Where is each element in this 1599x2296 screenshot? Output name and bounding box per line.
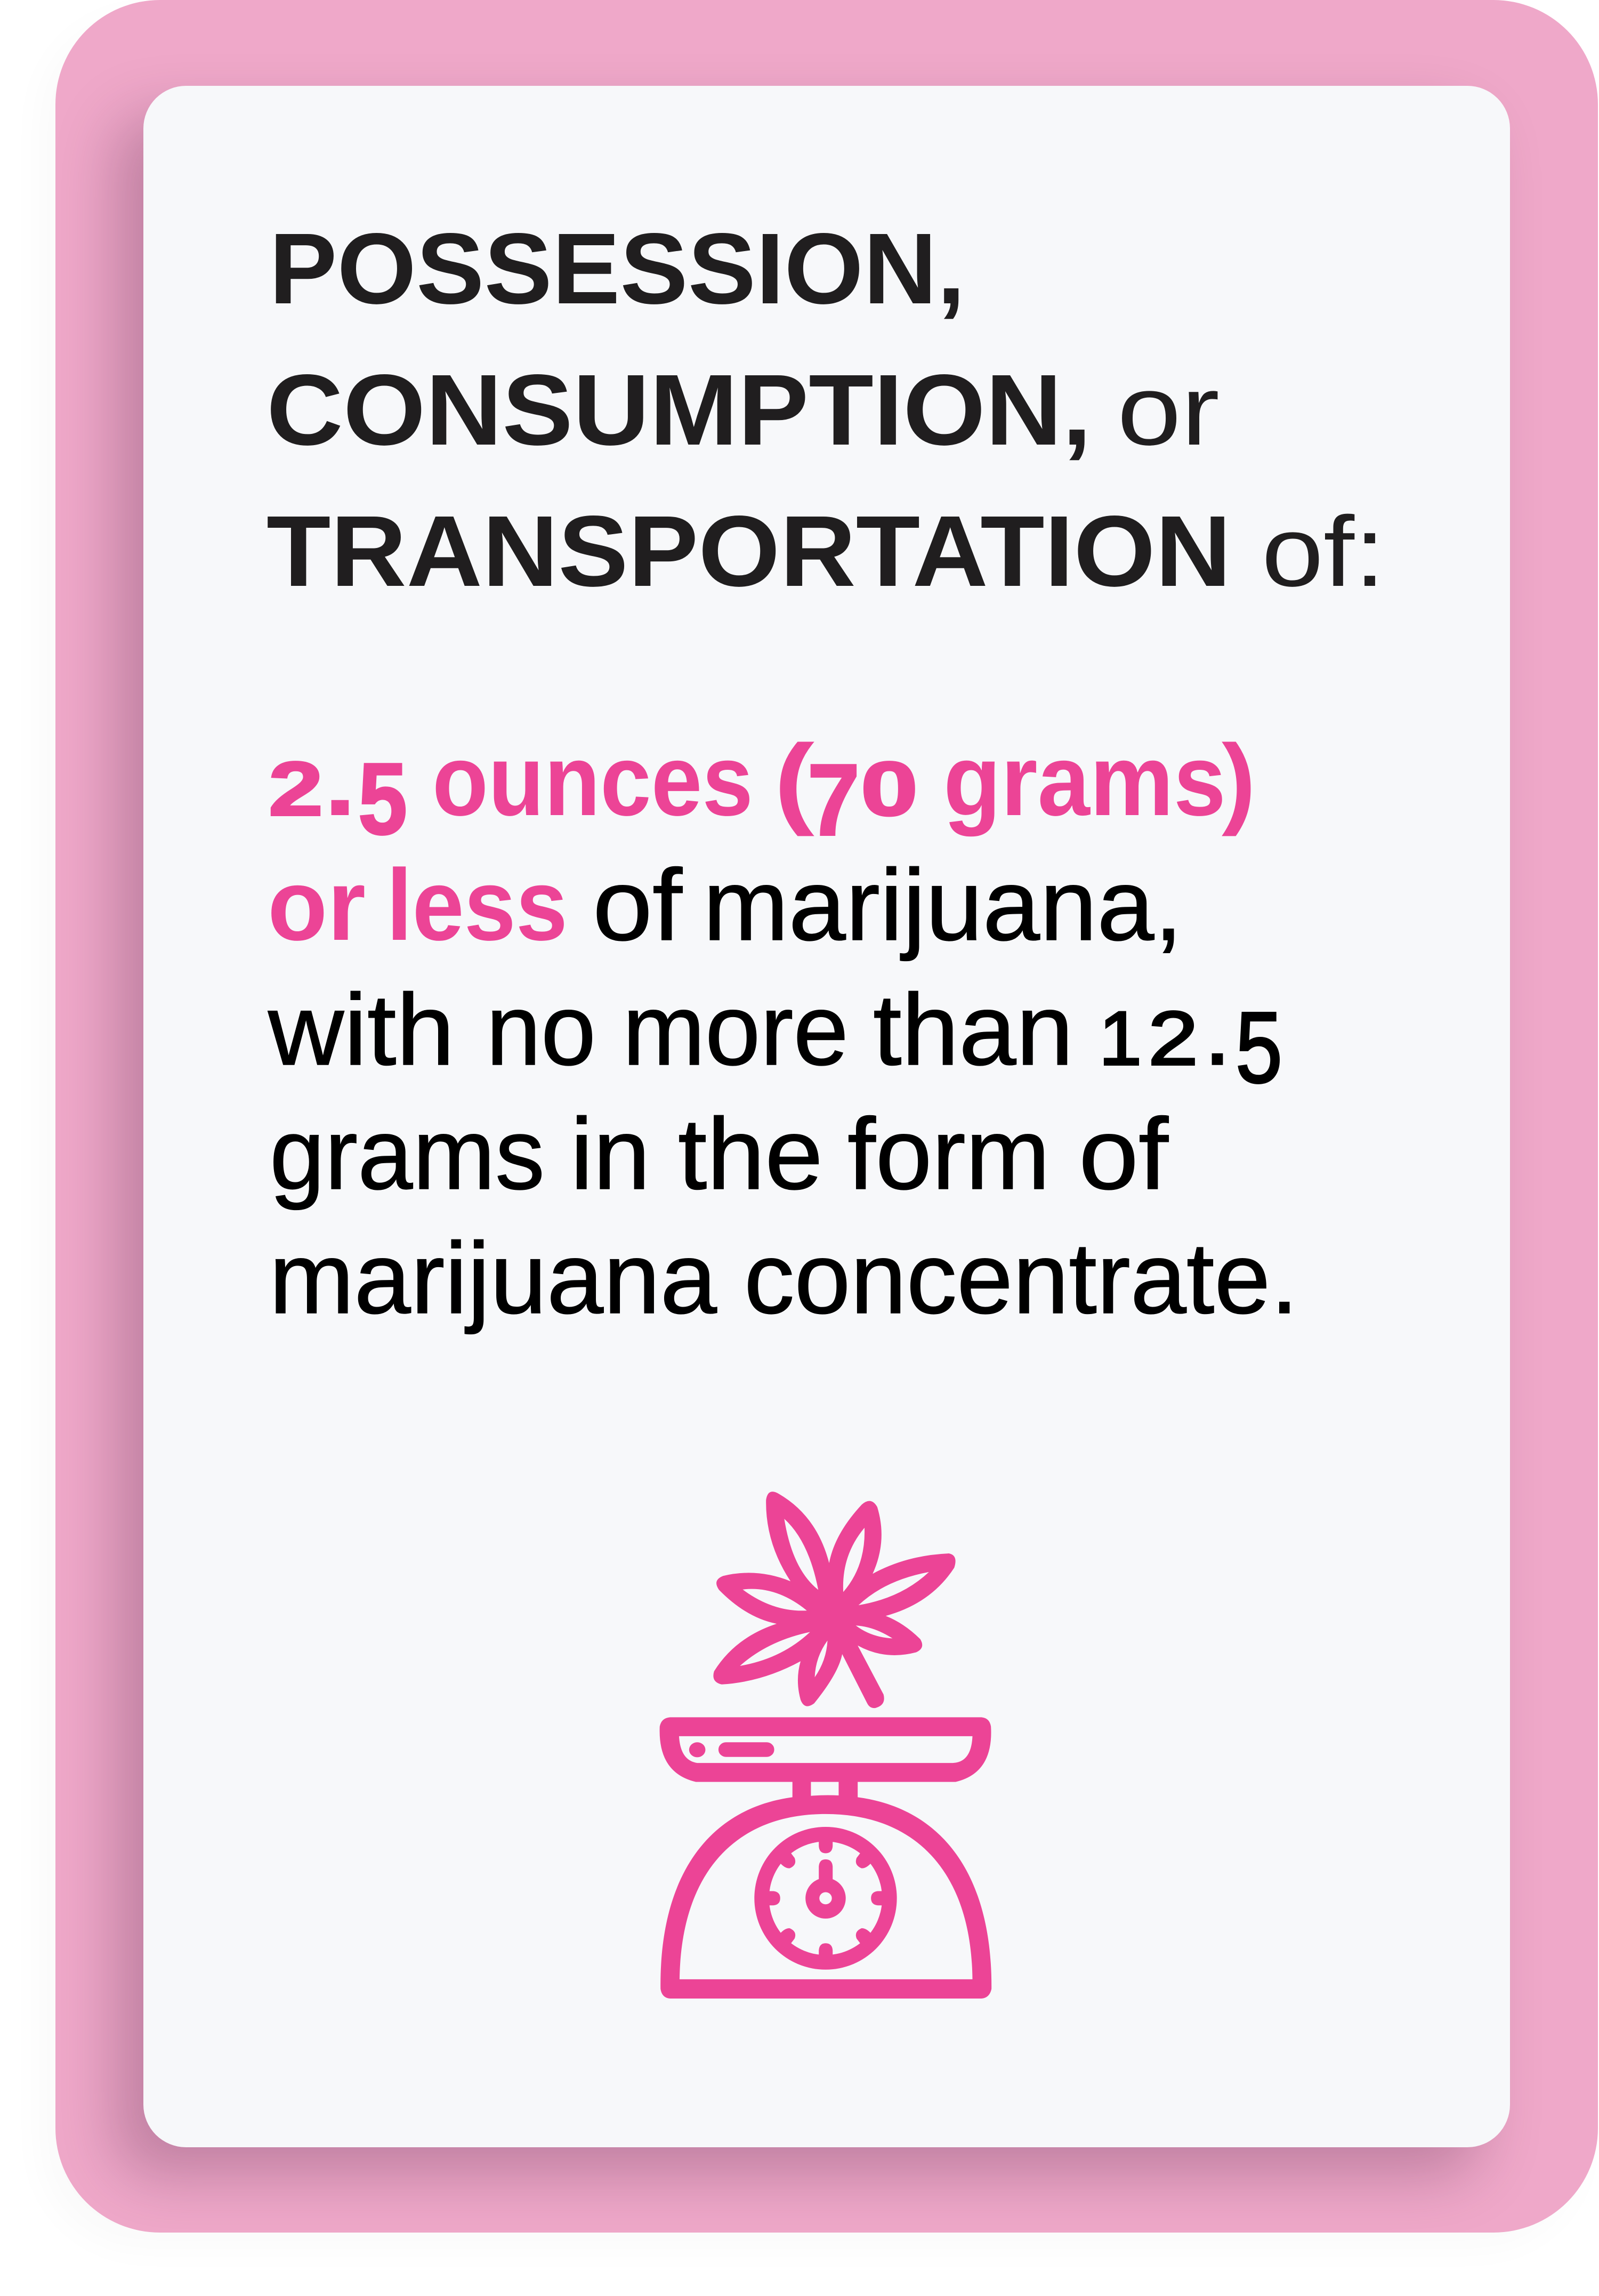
highlighted text: 2.5 ounces (70 grams) or less <box>268 724 1256 962</box>
highlighted text: 2.5 ounces (70 grams) or less: 0 <box>861 747 918 832</box>
heading: possession, consumption, transportation: or <box>1117 355 1220 466</box>
highlighted text: 2.5 ounces (70 grams) or less: ) <box>1222 724 1256 837</box>
body text: of marijuana, with no more than 12.5 grams in the form of marijuana concentrate: marijuana, <box>703 849 1183 962</box>
body text: of marijuana, with no more than 12.5 grams in the form of marijuana concentrate <box>268 849 1298 1335</box>
highlighted text: 2.5 ounces (70 grams) or less: 5 <box>358 743 407 856</box>
highlighted text: 2.5 ounces (70 grams) or less: 2 <box>269 747 323 832</box>
heading: possession, consumption, transportation: CONSUMPTION, <box>266 354 1092 466</box>
body text: of marijuana, with no more than 12.5 grams in the form of marijuana concentrate: form <box>847 1098 1050 1211</box>
icon part: dial <box>754 1827 897 1970</box>
heading: possession, consumption, transportation: POSSESSION, <box>269 213 965 325</box>
highlighted text: 2.5 ounces (70 grams) or less: ounces <box>432 724 753 837</box>
body text: of marijuana, with no more than 12.5 grams in the form of marijuana concentrate: 5 <box>1235 992 1282 1104</box>
icon part: tray indicator dot <box>689 1742 705 1757</box>
body text: of marijuana, with no more than 12.5 grams in the form of marijuana concentrate: with <box>268 973 455 1086</box>
highlighted text: 2.5 ounces (70 grams) or less: 7 <box>807 744 860 857</box>
heading: possession, consumption, transportation: of: <box>1262 496 1385 607</box>
body text: of marijuana, with no more than 12.5 grams in the form of marijuana concentrate: of <box>593 849 683 962</box>
highlighted text: 2.5 ounces (70 grams) or less: or <box>268 849 366 962</box>
body text: of marijuana, with no more than 12.5 grams in the form of marijuana concentrate: grams <box>270 1098 545 1211</box>
icon part: tray indicator bar <box>718 1742 774 1757</box>
body text: of marijuana, with no more than 12.5 grams in the form of marijuana concentrate: than <box>873 973 1073 1086</box>
body text: of marijuana, with no more than 12.5 grams in the form of marijuana concentrate: in <box>570 1098 650 1211</box>
icon part: scale body and tray <box>660 1717 991 1999</box>
body text: of marijuana, with no more than 12.5 grams in the form of marijuana concentrate: . <box>1202 973 1232 1086</box>
highlighted text: 2.5 ounces (70 grams) or less: grams <box>943 724 1226 837</box>
heading: possession, consumption, transportation <box>266 213 1385 608</box>
body text: of marijuana, with no more than 12.5 grams in the form of marijuana concentrate: no <box>486 973 596 1086</box>
body text: of marijuana, with no more than 12.5 grams in the form of marijuana concentrate: more <box>623 973 849 1086</box>
body text: of marijuana, with no more than 12.5 grams in the form of marijuana concentrate: concentrate. <box>744 1222 1298 1335</box>
highlighted text: 2.5 ounces (70 grams) or less: ( <box>774 724 815 837</box>
body text: of marijuana, with no more than 12.5 grams in the form of marijuana concentrate: 2 <box>1148 996 1198 1081</box>
body text: of marijuana, with no more than 12.5 grams in the form of marijuana concentrate: marijuana <box>269 1222 717 1335</box>
body text: of marijuana, with no more than 12.5 grams in the form of marijuana concentrate: the <box>678 1098 823 1211</box>
panel: white card <box>143 86 1510 2147</box>
icon part: cannabis leaf <box>713 1492 956 1708</box>
highlighted text: 2.5 ounces (70 grams) or less: less <box>386 849 568 962</box>
heading: possession, consumption, transportation: TRANSPORTATION <box>266 495 1231 608</box>
highlighted text: 2.5 ounces (70 grams) or less: . <box>323 724 357 837</box>
icon: cannabis leaf on kitchen scale <box>660 1492 991 1999</box>
body text: of marijuana, with no more than 12.5 grams in the form of marijuana concentrate: of <box>1079 1098 1169 1211</box>
body text: of marijuana, with no more than 12.5 grams in the form of marijuana concentrate: 1 <box>1099 996 1142 1081</box>
